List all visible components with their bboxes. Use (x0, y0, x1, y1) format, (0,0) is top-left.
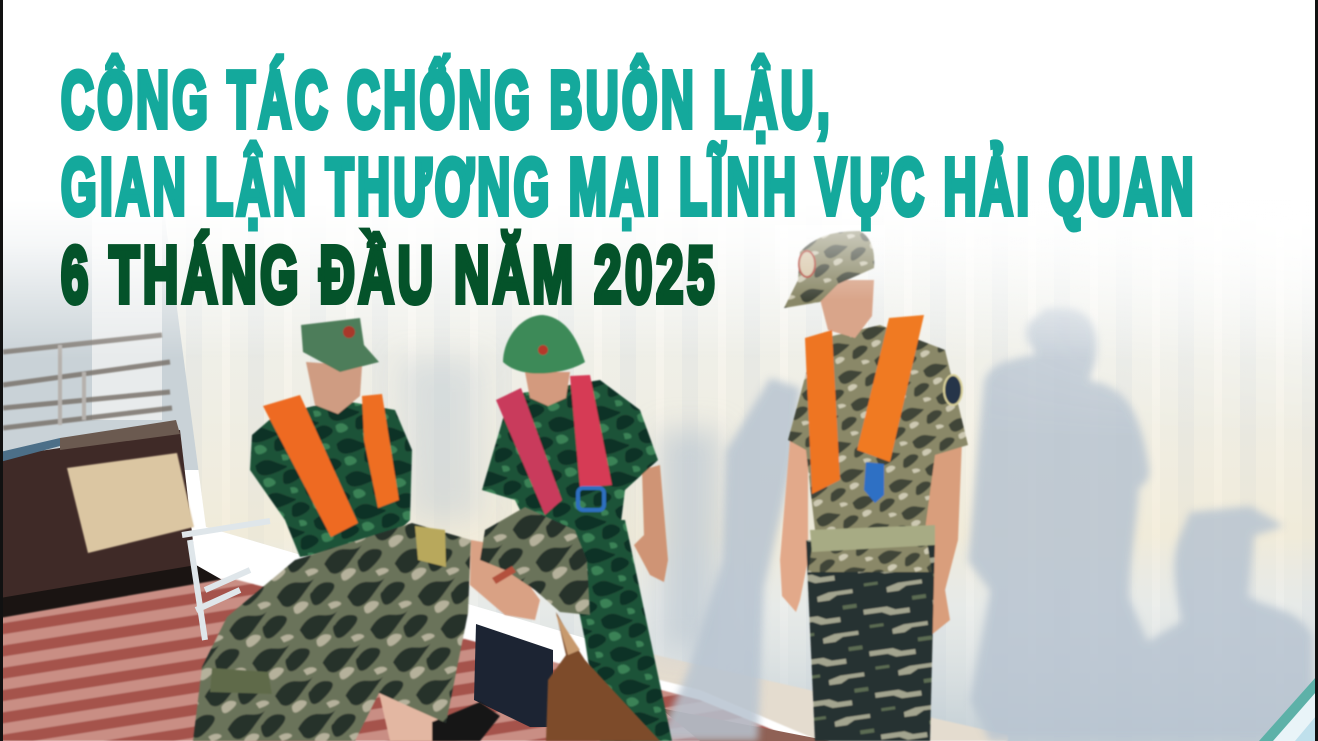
glove (432, 702, 500, 741)
soldier: third, standing right (780, 231, 968, 741)
red deck (0, 578, 800, 741)
shadow: third soldier (968, 308, 1209, 741)
dog (546, 612, 660, 741)
cap badge (799, 251, 815, 277)
shadow: left figure (658, 378, 800, 741)
wall soft shading (400, 360, 720, 650)
face (815, 280, 874, 338)
helmet (503, 315, 585, 374)
back and body (193, 523, 471, 741)
trousers (560, 520, 672, 741)
right side haze (1041, 314, 1315, 366)
cap badge (343, 326, 355, 338)
belt (210, 668, 272, 694)
cap (784, 231, 874, 308)
title line 3: 6 THÁNG ĐẦU NĂM 2025 (61, 230, 718, 319)
face (525, 372, 570, 406)
blue buckle (578, 488, 604, 510)
ship hull (0, 420, 240, 628)
bottom right corner decoration (1259, 677, 1316, 741)
trousers (806, 540, 935, 741)
soldier: first, left with orange vest (250, 318, 412, 557)
shoulder badge (944, 375, 962, 405)
shirt (788, 325, 968, 572)
briefcase (474, 624, 553, 727)
ship superstructure (0, 180, 200, 470)
wall shadows (658, 308, 1312, 741)
shirt (482, 380, 658, 530)
hand (634, 465, 668, 582)
container wall (160, 180, 1318, 741)
orange vest straps (263, 395, 358, 537)
life vest (805, 330, 840, 494)
helmet badge (538, 345, 548, 355)
photo: ship and container scene (0, 180, 1318, 741)
lower forearm (379, 693, 446, 741)
small stair frame (182, 521, 270, 640)
cap (480, 507, 590, 615)
belt (810, 525, 935, 552)
shadow: cap figure (1132, 506, 1312, 741)
blue tag (864, 462, 884, 503)
skin arm (470, 540, 540, 620)
shirt (250, 400, 412, 557)
cap (301, 318, 379, 372)
pink vest (496, 388, 562, 515)
washed top of third soldier's cap (775, 225, 885, 300)
face (306, 362, 362, 414)
soldier: second, with pink vest (482, 315, 672, 741)
epaulet (415, 526, 446, 567)
white fade over top of photo (0, 0, 1318, 360)
wristband (492, 566, 516, 584)
soldier: bending foreground (193, 507, 590, 741)
title (61, 55, 1197, 319)
arms (780, 440, 808, 612)
